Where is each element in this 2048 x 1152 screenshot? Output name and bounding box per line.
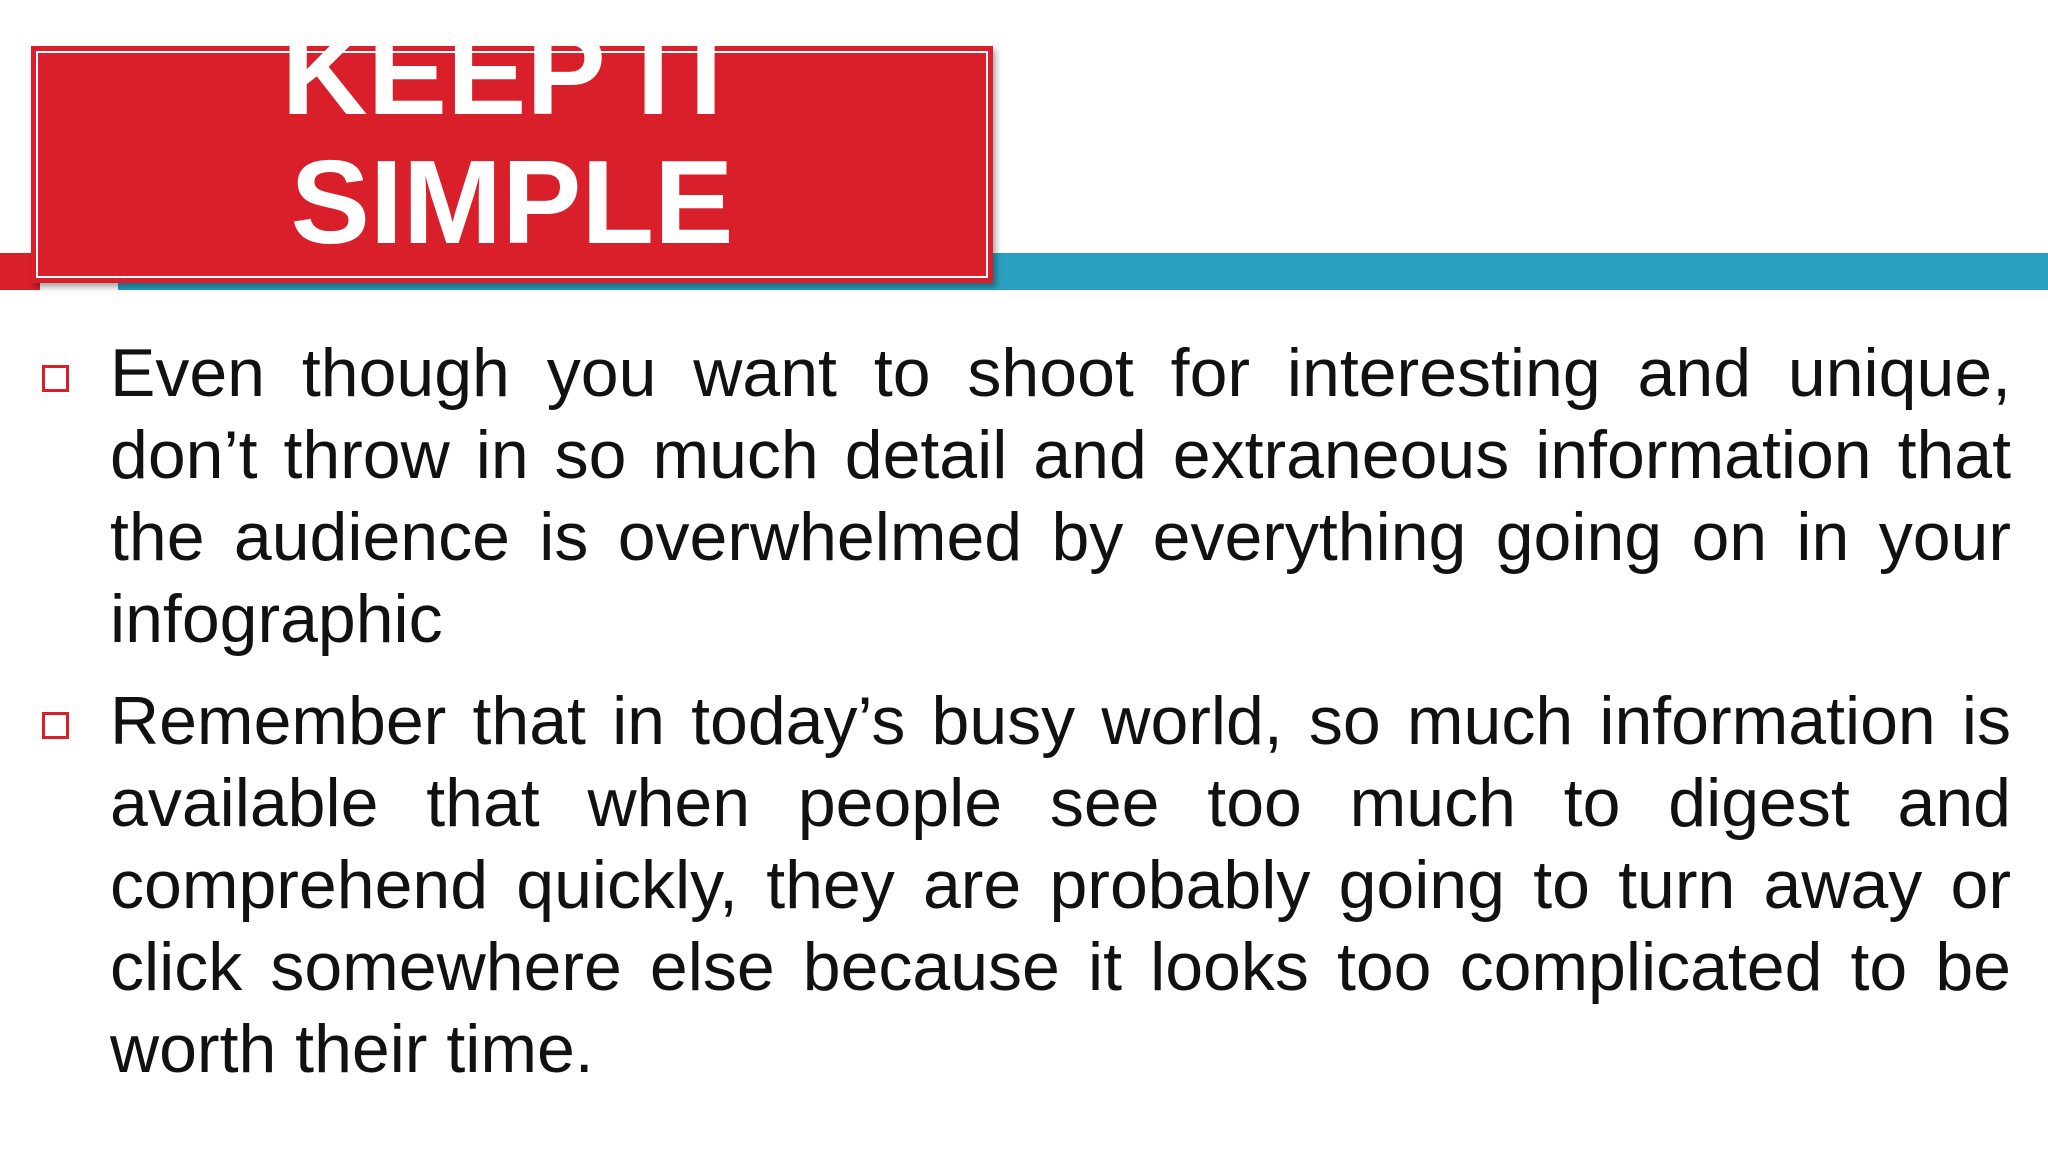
- paragraph 2: worth their time.: [110, 1011, 594, 1087]
- paragraph 1: infographic: [110, 581, 443, 657]
- paragraph 1: don’t throw in so much detail and extraneous information that: [110, 417, 2011, 493]
- title box: [31, 46, 993, 283]
- paragraph 1: the audience is overwhelmed by everything going on in your: [110, 499, 2011, 575]
- paragraph 1: [110, 335, 2011, 657]
- paragraph 1: Even though you want to shoot for interesting and unique,: [110, 335, 2011, 411]
- title text: [282, 46, 742, 269]
- paragraph 2: comprehend quickly, they are probably going to turn away or: [110, 847, 2011, 923]
- paragraph 2: available that when people see too much to digest and: [110, 765, 2011, 841]
- bullet icon 2: [42, 712, 69, 739]
- paragraph 2: [110, 683, 2011, 1087]
- paragraph 2: Remember that in today’s busy world, so much information is: [110, 683, 2011, 759]
- bullet icon 1: [42, 365, 69, 392]
- paragraph 2: click somewhere else because it looks too complicated to be: [110, 929, 2011, 1005]
- title text: SIMPLE: [290, 136, 734, 269]
